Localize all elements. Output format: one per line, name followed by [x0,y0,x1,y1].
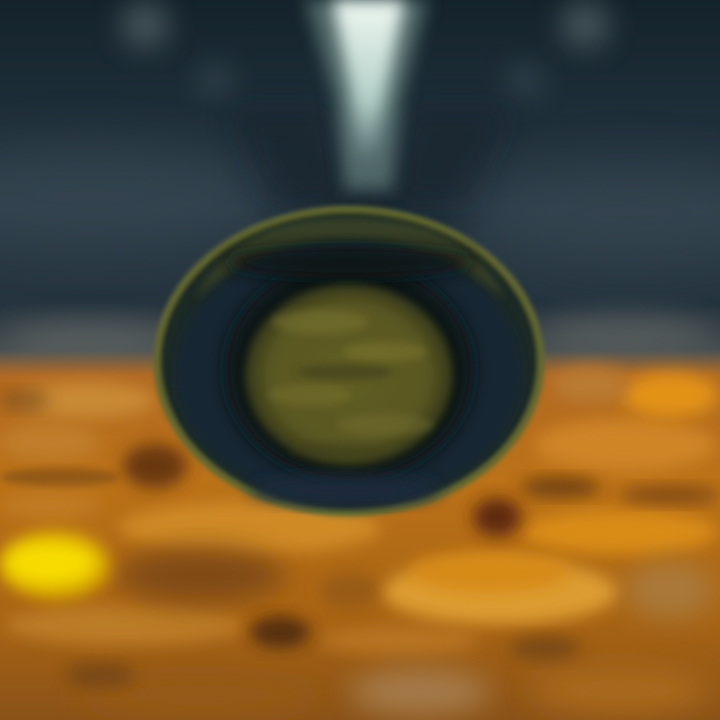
bright yellow coin [0,531,110,599]
light beam [305,0,428,190]
coin upper olive band [195,218,505,300]
coin gold centre [245,284,453,466]
coin rim [157,209,541,513]
dark gaps between coins [0,390,720,687]
coin dark blue ring [175,240,523,504]
coin bottom edge shadow [250,477,440,503]
coin black inner ring [225,260,473,480]
golden coin pile [0,350,720,720]
central coin [157,209,541,513]
background: dark stormy sky [0,0,720,380]
